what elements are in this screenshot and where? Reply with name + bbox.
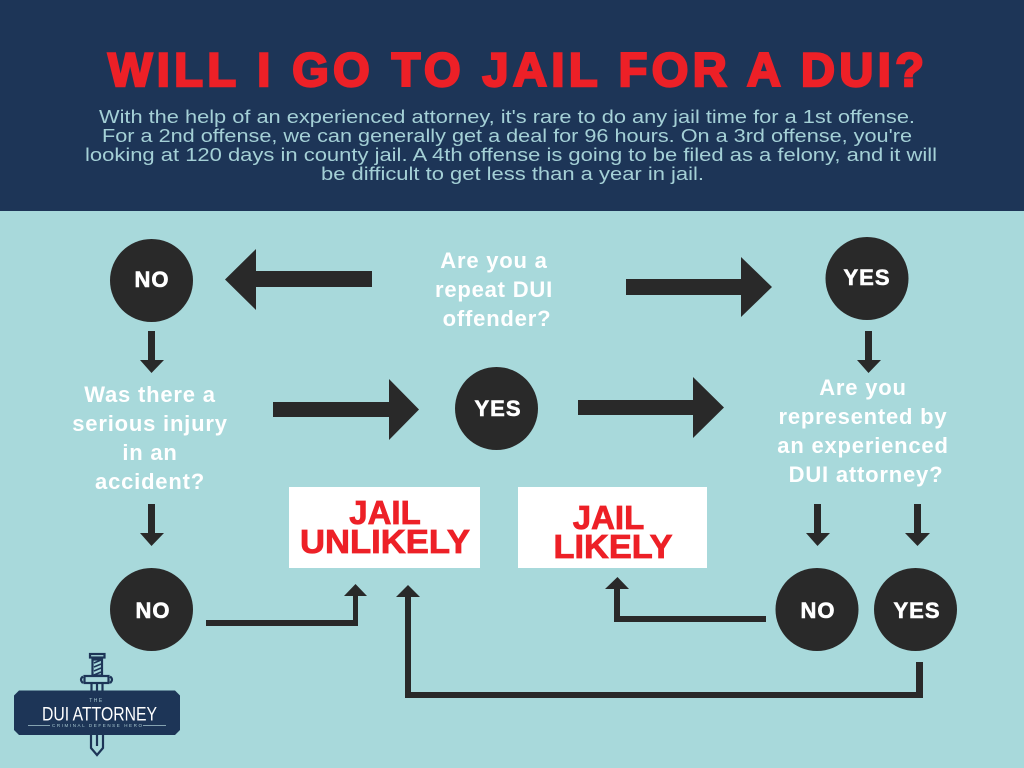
question: serious injury: in an bbox=[122, 440, 178, 465]
intro text: For a 2nd offense, we can generally get a deal for 96 hours. On a 3rd offense, you're bbox=[102, 125, 912, 146]
question: represented by attorney: DUI attorney? bbox=[789, 462, 943, 487]
arrow: injury question down to no bbox=[140, 504, 164, 546]
question: repeat offender: offender? bbox=[443, 306, 551, 331]
logo: the dui attorney bbox=[14, 654, 180, 755]
circle: no lower left: NO bbox=[136, 598, 170, 623]
arrow: yes to attorney question bbox=[578, 377, 724, 438]
question: repeat offender bbox=[435, 248, 553, 331]
box: jail unlikely: UNLIKELY bbox=[300, 523, 470, 560]
intro text: With the help of an experienced attorney, it's rare to do any jail time for a 1st offense. bbox=[99, 106, 915, 127]
arrow: no to jail unlikely bbox=[206, 584, 367, 626]
arrow: injury to yes bbox=[273, 379, 419, 440]
question: represented by attorney: an experienced bbox=[777, 433, 949, 458]
question: serious injury: serious injury bbox=[72, 411, 228, 436]
arrow: to no top bbox=[225, 249, 372, 310]
arrow: attorney question down to no bbox=[806, 504, 830, 546]
logo: the dui attorney: THE bbox=[89, 698, 104, 704]
logo: the dui attorney: CRIMINAL DEFENSE HERO bbox=[52, 723, 142, 728]
arrow: yes to jail unlikely bbox=[396, 585, 923, 698]
circle: no top bbox=[110, 239, 193, 322]
arrow: yes down to attorney question bbox=[857, 331, 881, 373]
box: jail unlikely: JAIL bbox=[349, 494, 421, 531]
intro text bbox=[85, 106, 937, 184]
circle: yes top bbox=[826, 237, 908, 320]
circle: yes lower right: YES bbox=[893, 598, 941, 623]
question: repeat offender: Are you a bbox=[440, 248, 548, 273]
arrow: no to jail likely bbox=[605, 577, 766, 622]
question: represented by attorney: represented by bbox=[779, 404, 947, 429]
circle: yes top: YES bbox=[843, 265, 891, 290]
circle: no lower right: NO bbox=[800, 598, 836, 623]
question: serious injury: accident? bbox=[95, 469, 205, 494]
logo: the dui attorney: DUI ATTORNEY bbox=[42, 704, 157, 726]
question: serious injury: Was there a bbox=[84, 382, 216, 407]
arrow: attorney question down to yes bbox=[905, 504, 930, 546]
title: WILL I GO TO JAIL FOR A DUI? bbox=[108, 43, 924, 96]
box: jail unlikely bbox=[289, 487, 480, 568]
header panel bbox=[0, 0, 1024, 211]
circle: no top: NO bbox=[134, 267, 170, 292]
question: serious injury bbox=[72, 382, 228, 494]
arrow: to yes top bbox=[626, 257, 772, 317]
question: represented by attorney: Are you bbox=[819, 375, 907, 400]
box: jail likely: LIKELY bbox=[554, 528, 672, 565]
question: repeat offender: repeat DUI bbox=[435, 277, 553, 302]
intro text: be difficult to get less than a year in jail. bbox=[321, 163, 704, 184]
question: represented by attorney bbox=[777, 375, 949, 487]
circle: yes middle bbox=[455, 367, 538, 450]
arrow: no down to injury question bbox=[140, 331, 164, 373]
box: jail likely: JAIL bbox=[573, 499, 644, 536]
circle: no lower left bbox=[110, 568, 193, 651]
circle: yes lower right bbox=[874, 568, 957, 651]
circle: yes middle: YES bbox=[474, 396, 522, 421]
intro text: looking at 120 days in county jail. A 4th offense is going to be filed as a felony, and it will bbox=[85, 144, 937, 165]
circle: no lower right bbox=[776, 568, 858, 651]
box: jail likely bbox=[518, 487, 707, 568]
